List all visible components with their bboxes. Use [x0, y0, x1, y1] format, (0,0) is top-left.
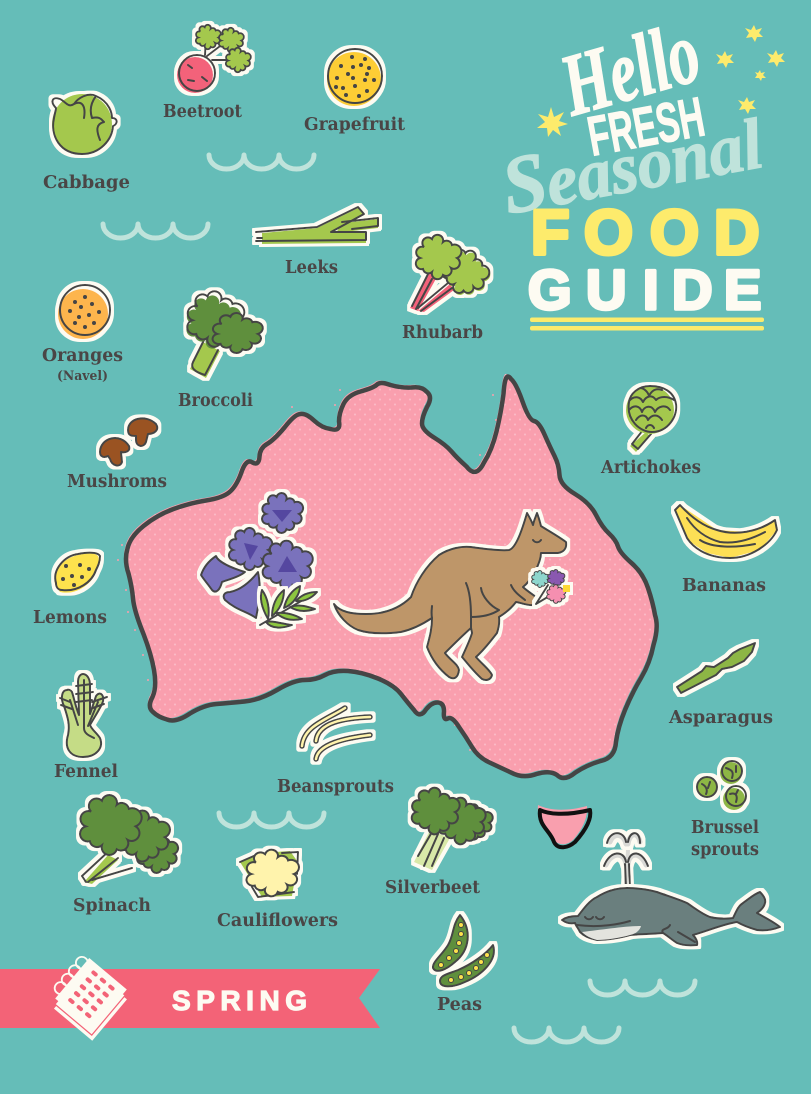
water spout [604, 833, 648, 888]
icon: mushrooms [100, 418, 157, 466]
item: Leeks [256, 207, 378, 278]
title: Fresh: FRESH [583, 85, 709, 168]
item: Broccoli [178, 291, 263, 411]
ribbon [0, 969, 380, 1028]
label: Oranges [42, 346, 123, 366]
item: Beetroot [163, 25, 251, 122]
label: Broccoli [178, 391, 253, 411]
label: Brussel [691, 818, 759, 838]
icon: lemon [54, 553, 100, 593]
icon: broccoli [186, 291, 263, 378]
title: Food: FOOD [531, 198, 760, 268]
whale body [562, 888, 780, 945]
icon: fennel [60, 674, 107, 757]
item: Grapefruit [304, 49, 405, 135]
title: Seasonal: Seasonal [495, 94, 769, 232]
map of Tasmania [538, 805, 590, 847]
icon: silverbeet [412, 788, 493, 870]
icon: beetroot [177, 25, 251, 93]
label: Asparagus [668, 708, 773, 728]
kangaroo body [334, 513, 566, 680]
item: Silverbeet [385, 788, 493, 898]
label: Spinach [73, 896, 151, 916]
icon: calendar [44, 953, 131, 1039]
label: Bananas [682, 576, 766, 596]
item: Asparagus [668, 643, 773, 728]
flower blossoms [201, 493, 313, 618]
item: Spinach [73, 795, 178, 916]
label: Beetroot [163, 102, 242, 122]
item: Fennel [54, 674, 118, 782]
label: Grapefruit [304, 115, 405, 135]
item: Oranges [42, 285, 123, 384]
icon: cabbage [52, 94, 117, 154]
icon: grapefruit [327, 49, 382, 106]
stars [537, 25, 785, 137]
label: Lemons [33, 608, 107, 628]
season label: SPRING [172, 985, 307, 1016]
label: Rhubarb [402, 323, 483, 343]
label: Peas [437, 995, 482, 1015]
title underline [530, 318, 764, 330]
label: Cabbage [43, 173, 130, 193]
icon: artichoke [626, 386, 676, 452]
icon: banana [675, 505, 777, 558]
item: Peas [433, 915, 494, 1015]
leaf sprig [260, 586, 317, 628]
label: Mushroms [67, 472, 167, 492]
kangaroo with bouquet [334, 513, 570, 680]
label: Fennel [54, 762, 118, 782]
season banner [0, 953, 380, 1039]
icon: asparagus [677, 643, 755, 693]
label: Silverbeet [385, 878, 480, 898]
item: Beansprouts [277, 708, 394, 797]
sublabel: (Navel) [57, 369, 108, 384]
icon: spinach [80, 795, 178, 884]
icon: brussel sprouts [697, 761, 746, 810]
jacaranda flowers [201, 493, 317, 628]
wave decorations [103, 155, 695, 1042]
map of Australia [117, 374, 657, 778]
title block [495, 4, 785, 331]
title: Guide: GUIDE [528, 258, 761, 321]
item: Lemons [33, 553, 107, 628]
label: Beansprouts [277, 777, 394, 797]
item: Artichokes [600, 386, 701, 478]
item: Brussel sprouts [691, 761, 759, 860]
item: Cauliflowers [217, 850, 338, 931]
item: Mushrooms [67, 418, 167, 492]
icon: beansprouts [302, 708, 370, 759]
icon: peas [433, 915, 494, 986]
label: Leeks [285, 258, 338, 278]
whale [562, 833, 780, 945]
item: Cabbage [43, 94, 130, 193]
icon: rhubarb [410, 235, 496, 312]
icon: cauliflower [240, 850, 299, 897]
item: Rhubarb [402, 235, 496, 343]
item: Bananas [675, 505, 777, 596]
label line two: sprouts [691, 840, 759, 860]
icon: leeks [256, 207, 378, 244]
label: Cauliflowers [217, 911, 338, 931]
bouquet [532, 570, 570, 604]
icon: orange [58, 285, 110, 339]
label: Artichokes [600, 458, 701, 478]
